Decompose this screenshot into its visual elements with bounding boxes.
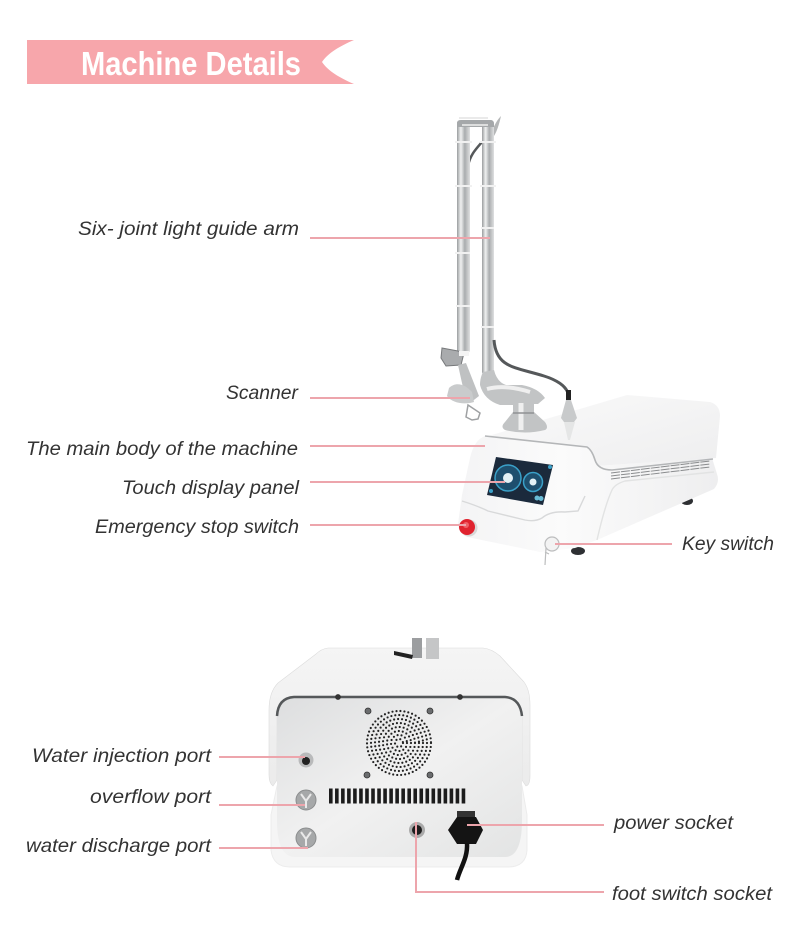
leader: emergency stop — [310, 524, 466, 526]
vent slots — [329, 788, 467, 804]
back plate — [277, 697, 522, 857]
machine feet — [571, 497, 693, 555]
front view machine — [441, 116, 720, 565]
main body — [458, 395, 720, 552]
fan grille — [367, 711, 431, 775]
leader: scanner — [310, 397, 470, 399]
label: scanner: Scanner — [226, 383, 299, 404]
leader: power socket — [467, 824, 604, 826]
leader: overflow — [219, 804, 305, 806]
arm base — [480, 370, 547, 432]
touch display panel — [487, 457, 553, 505]
foot switch socket — [409, 822, 425, 838]
key switch — [545, 537, 559, 565]
emergency stop switch — [459, 519, 478, 536]
heading: Machine Details: Machine Details — [81, 45, 301, 82]
label: water injection: Water injection port — [32, 746, 212, 767]
leader: six-joint arm — [310, 237, 490, 239]
water injection port — [298, 752, 314, 768]
side vent — [611, 461, 710, 479]
label: power socket: power socket — [613, 813, 734, 834]
light guide arm — [455, 116, 577, 440]
label: overflow: overflow port — [90, 787, 212, 808]
lower clear base — [271, 786, 527, 867]
label: arm: Six- joint light guide arm — [78, 219, 299, 240]
water discharge port — [296, 828, 316, 848]
leader: water discharge — [219, 847, 308, 849]
leader: key switch — [555, 543, 672, 545]
rear view machine — [269, 638, 530, 880]
title banner — [27, 40, 354, 84]
scanner — [441, 348, 480, 420]
label: main body: The main body of the machine — [26, 439, 298, 460]
label: emergency stop: Emergency stop switch — [95, 517, 299, 538]
rear top shell — [269, 648, 530, 786]
label: key switch: Key switch — [682, 534, 774, 555]
overflow port — [296, 790, 316, 810]
fasteners — [336, 694, 462, 778]
leader: main body — [310, 445, 485, 447]
label: water discharge: water discharge port — [26, 836, 212, 857]
power socket and cable — [448, 811, 483, 880]
leader: water injection — [219, 756, 305, 758]
label: foot switch: foot switch socket — [612, 884, 773, 905]
label: touch display: Touch display panel — [122, 478, 300, 499]
leader: foot switch — [416, 822, 604, 892]
rear top connector — [394, 638, 439, 659]
leader: touch display — [310, 481, 505, 483]
